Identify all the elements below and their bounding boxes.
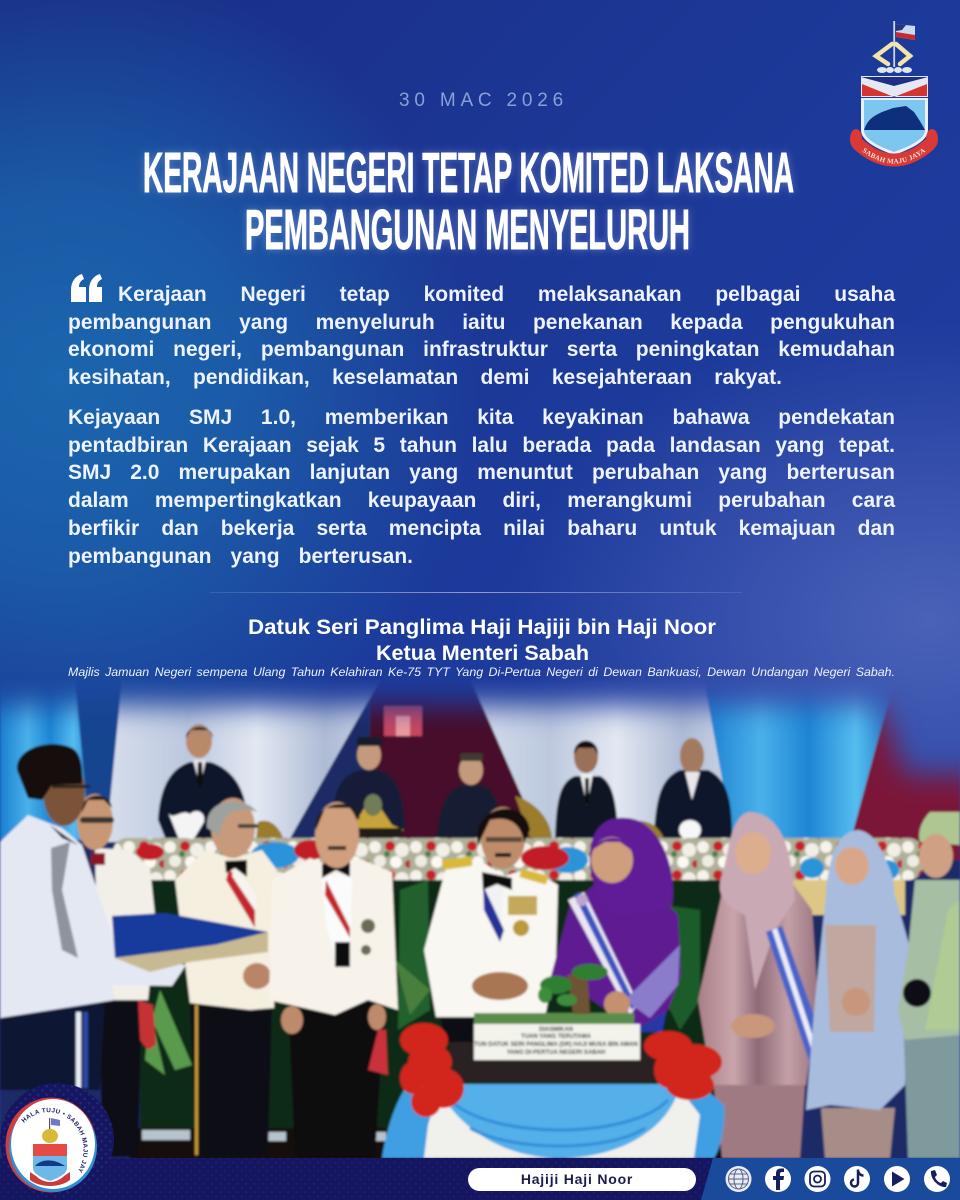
signboard text: TUAN YANG TERUTAMA: [521, 1034, 592, 1040]
motto text: SABAH MAJU JAYA: [862, 148, 926, 164]
back row: attendant 1: [158, 724, 246, 842]
back row: attendant 4: [555, 741, 618, 850]
quote: paragraph 1: kesihatan, pendidikan, keselamatan demi kesejahteraan rakyat.: [68, 366, 782, 389]
back row: palace guard 3: [436, 752, 498, 838]
guest: lady in green: [898, 812, 960, 1158]
quote: paragraph 1: [68, 283, 896, 389]
flag pole and flag: [893, 21, 915, 67]
icon: phone: [924, 1166, 950, 1192]
shield with Mount Kinabalu: [861, 98, 928, 155]
guest: lady in pale blue: [806, 830, 912, 1158]
mini crest: [30, 1118, 70, 1186]
footer: name pill: Hajiji Haji Noor: [521, 1171, 633, 1187]
signboard text: TUN DATUK SERI PANGLIMA (DR) HAJI MUSA BIN AMAN: [474, 1042, 638, 1048]
guest: lady in purple: [550, 818, 681, 1032]
shield chief: [861, 76, 928, 97]
icon: instagram: [804, 1166, 830, 1192]
skirted cake table: [382, 1084, 724, 1158]
quote: paragraph 2: berfikir dan bekerja serta mencipta nilai baharu untuk kemajuan dan: [68, 517, 895, 540]
icon: quotation mark: [71, 274, 102, 302]
footer: navy band: [0, 1158, 960, 1200]
quote: paragraph 2: [68, 406, 896, 568]
footer: logo badge: [0, 1083, 114, 1197]
guest: lady in mauve: [698, 812, 828, 1158]
guest: Governor in white uniform: [424, 807, 558, 1042]
quote: paragraph 2: SMJ 2.0 merupakan lanjutan yang menuntut perubahan yang berterusan: [68, 461, 895, 484]
quote: paragraph 2: Kejayaan SMJ 1.0, memberikan kita keyakinan bahawa pendekatan: [68, 406, 895, 429]
quote: paragraph 1: ekonomi negeri, pembangunan infrastruktur serta peningkatan kemudahan: [68, 338, 895, 361]
crest: Sabah coat of arms: [850, 21, 938, 166]
title: [140, 141, 796, 262]
icon: tiktok: [844, 1166, 870, 1192]
cadet with tray: [0, 744, 268, 1090]
signature: name and position: [248, 616, 716, 665]
quote: paragraph 2: pentadbiran Kerajaan sejak 5 tahun lalu berada pada landasan yang tepat.: [68, 434, 895, 457]
cake with signboard and bonsai: [450, 964, 665, 1082]
icon: facebook: [765, 1166, 791, 1192]
motto ribbon: [850, 129, 938, 166]
quote: paragraph 1: Kerajaan Negeri tetap komited melaksanakan pelbagai usaha: [118, 283, 895, 306]
caption: Majlis Jamuan Negeri sempena Ulang Tahun Kelahiran Ke-75 TYT Yang Di-Pertua Negeri di Dewan Bankuasi, Dewan Undangan Negeri Sabah.: [68, 665, 895, 679]
signature: position: Ketua Menteri Sabah: [376, 642, 589, 665]
red floral bows: [400, 1023, 722, 1117]
guest: chief minister: [269, 802, 398, 1157]
guest: man in white jacket behind cadet: [77, 794, 156, 1157]
quote: paragraph 2: dalam mempertingkatkan keupayaan diri, merangkumi perubahan cara: [68, 489, 895, 512]
back row: gold emblem: [354, 794, 404, 840]
floral table: [113, 838, 923, 915]
back row: palace guard 2: [333, 737, 405, 830]
photo: state banquet cake cutting: [0, 684, 960, 1158]
wreath: [877, 67, 912, 73]
gilded thrones: [256, 796, 666, 846]
signature: name: Datuk Seri Panglima Haji Hajiji bin Haji Noor: [248, 616, 716, 639]
quote: paragraph 1: pembangunan yang menyeluruh iaitu penekanan kepada pengukuhan: [68, 311, 895, 334]
date: 30 MAC 2026: [399, 90, 568, 111]
signboard text: DIASMIKAN: [539, 1027, 573, 1033]
photo scene: [0, 660, 960, 1160]
greenery backdrop: [130, 880, 735, 1160]
arms holding the flag: [876, 44, 910, 64]
footer: blue social panel: [701, 1158, 960, 1200]
icon: play: [884, 1166, 910, 1192]
signboard text: YANG DI-PERTUA NEGERI SABAH: [507, 1050, 605, 1056]
footer: name pill: [468, 1168, 696, 1191]
stage backdrop: [0, 660, 960, 1160]
back row: attendant 5: [654, 738, 732, 850]
icon: globe: [726, 1166, 752, 1192]
quote: paragraph 2: pembangunan yang berterusan.: [68, 545, 413, 568]
guest: grey-haired man: [175, 798, 277, 1157]
